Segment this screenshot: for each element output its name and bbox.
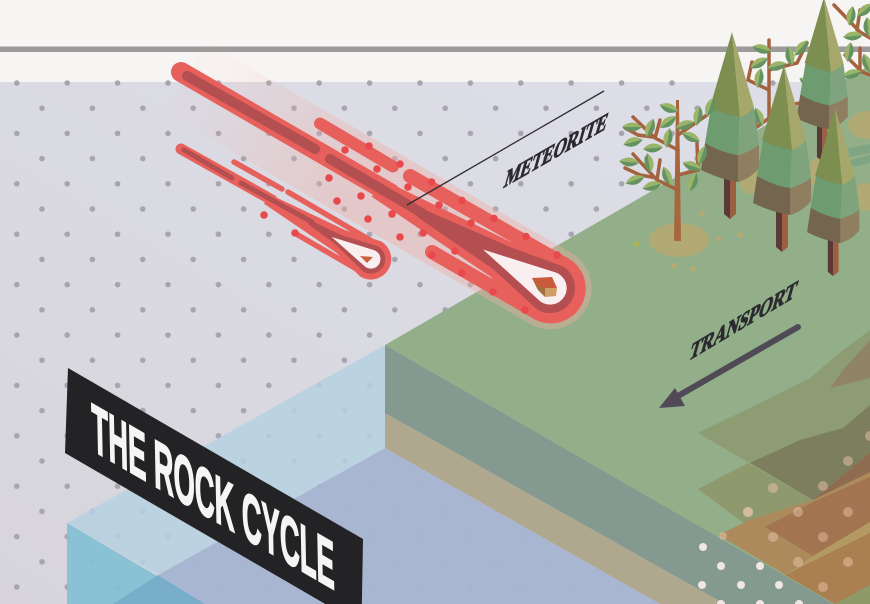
large meteorite: white head [483,250,567,305]
ground patches [634,111,870,272]
large meteorite: upper streak near [410,176,564,264]
layer: upper olive shadow [750,405,870,500]
large meteorite: sparks [260,142,561,314]
tree: background deciduous centre [748,37,844,128]
layer: lower brown [785,533,870,604]
small meteorite: rock [360,256,373,263]
large meteorite: dark core [418,209,575,313]
horizontal rule [0,46,870,52]
small meteorite: white head [332,237,380,269]
small meteorite [181,149,391,280]
small meteorite: red body [264,194,391,280]
large meteorite: tail [181,72,390,193]
ocean: overlap shade [113,575,205,604]
land: teal stratum [385,345,835,604]
layer: rocky peak [830,340,870,388]
large meteorite: red body [372,179,586,323]
large meteorite: lower streak [432,252,536,312]
tree: conifer centre [753,65,811,252]
mountain dots [719,431,870,592]
small meteorite: streaks [234,162,375,271]
ocean: deep floor [158,448,660,604]
label: transport: TRANSPORT [686,275,800,367]
layer: upper olive slope [698,330,870,500]
tree: conifer front right [807,108,859,276]
panel: ocean [67,345,660,604]
large meteorite: upper streak far [320,124,393,166]
mountain layers [698,330,870,604]
layer: yellow strip [785,522,870,575]
title banner [65,368,363,604]
layer: red band [813,453,870,500]
arrow: transport [659,327,798,408]
tree: deciduous foreground [619,96,718,241]
layer: orange slope [718,472,870,604]
small meteorite: dark core [308,220,385,274]
tree: conifer back right [797,0,848,162]
ocean: light water surface [67,345,385,575]
layer: lower olive slope [698,463,813,528]
large meteorite: dark tail [187,76,422,213]
stratum dots [698,543,803,604]
large meteorite: rock [532,277,557,297]
tree: conifer left [701,32,759,219]
layer: olive corner [835,585,870,604]
meteor glow trail [166,42,592,329]
label: meteorite: METEORITE [501,107,611,194]
ocean: front left face [67,523,205,604]
small meteorite: dark tail [184,150,312,222]
small meteorite: tail [181,149,272,200]
land: green top surface [385,65,870,604]
layer: orange shadow [765,477,870,556]
large meteorite [181,72,586,323]
land: tan stratum [385,413,725,604]
background: top paper band [0,0,870,82]
meteorite leader line [407,91,604,205]
panel: land block [385,65,870,604]
tree: background deciduous right [834,0,870,81]
